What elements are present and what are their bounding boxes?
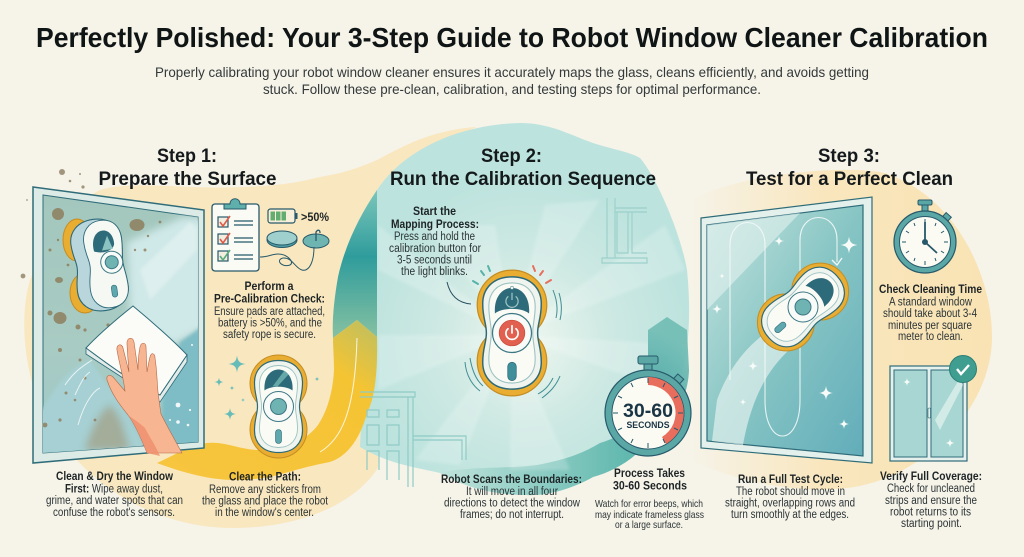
step 1 heading: Step 1: [157, 146, 217, 167]
text: robot scans the boundaries: It will move in all four [466, 486, 558, 498]
swoosh highlight line [320, 338, 357, 452]
text: process takes 30-60 seconds: may indicate frameless glass [595, 509, 704, 521]
icon: cleaning pad [267, 231, 297, 248]
clean window illustration [701, 197, 872, 463]
window line art [602, 198, 647, 263]
step 1 heading [98, 146, 276, 190]
text: verify full coverage: starting point. [901, 518, 962, 530]
arrow: callout to robot [447, 282, 471, 304]
icon: verified sliding window [890, 356, 976, 461]
step 1 heading: Prepare the Surface [98, 169, 276, 190]
icon: centered robot [250, 355, 307, 458]
text: clear the path [202, 470, 329, 519]
step 3 heading: Test for a Perfect Clean [746, 169, 953, 190]
icon: robot with power button [477, 270, 547, 396]
icon: robot moving diagonally [746, 251, 860, 363]
building line art [360, 392, 466, 487]
text: run a full test cycle: The robot should move in [736, 486, 845, 498]
icon: stopwatch 30-60 seconds: SECONDS [626, 420, 670, 431]
text: process takes 30-60 seconds [595, 466, 704, 531]
text: clean and dry: confuse the robot's sensors. [53, 507, 175, 519]
icon: robot on dirty window [63, 216, 131, 314]
text: pre-calibration check: battery is >50%, and the [218, 318, 322, 330]
text: start the mapping process: the light blinks. [401, 266, 468, 278]
text: process takes 30-60 seconds: Watch for error beeps, which [595, 498, 703, 510]
text: check cleaning time: minutes per square [888, 320, 972, 332]
text: check cleaning time: Check Cleaning Time [879, 282, 982, 296]
text: pre-calibration check [214, 279, 325, 341]
dirty window illustration [33, 187, 205, 463]
text: verify full coverage: strips and ensure the [885, 495, 977, 507]
text: robot scans the boundaries: directions to detect the window [444, 498, 581, 510]
text: process takes 30-60 seconds: or a large surface. [615, 519, 683, 531]
text: start the mapping process: Press and hold the [394, 231, 475, 243]
text: start the mapping process: 3-5 seconds until [397, 254, 472, 266]
text: robot scans the boundaries: Robot Scans the Boundaries: [441, 472, 582, 486]
text: run a full test cycle: Run a Full Test Cycle: [738, 472, 843, 486]
text: check cleaning time: should take about 3-4 [883, 308, 978, 320]
text: verify full coverage [880, 469, 982, 530]
icon: hand [107, 338, 182, 456]
text: process takes 30-60 seconds: 30-60 Seconds [613, 478, 687, 492]
intro text: stuck. Follow these pre-clean, calibration, and testing steps for optimal performance. [263, 81, 761, 97]
panel: step 3 [701, 146, 982, 530]
intro text: Properly calibrating your robot window cleaner ensures it accurately maps the glass, cleans efficiently, and avoids getting [155, 64, 869, 80]
text: clear the path: the glass and place the robot [202, 496, 329, 508]
text: clean and dry: Clean & Dry the Window [56, 469, 174, 483]
text: robot scans the boundaries: frames; do not interrupt. [460, 509, 564, 521]
text: pre-calibration check: safety rope is secure. [223, 329, 316, 341]
step 3 heading [746, 146, 953, 190]
text: run a full test cycle: straight, overlapping rows and [725, 498, 855, 510]
text: start the mapping process: calibration button for [389, 243, 481, 255]
icon: clock [894, 200, 956, 273]
text: verify full coverage: Check for uncleaned [887, 483, 975, 495]
panel: step 1 [21, 146, 329, 519]
title: Perfectly Polished: Your 3-Step Guide to Robot Window Cleaner Calibration [36, 22, 988, 53]
step 2 heading [390, 146, 656, 190]
text: pre-calibration check: Pre-Calibration Check: [214, 292, 325, 306]
text: clear the path: Clear the Path: [229, 470, 301, 484]
text: start the mapping process: Start the [413, 204, 456, 218]
background blob: step 1 yellow [24, 127, 477, 528]
text: check cleaning time [879, 282, 982, 343]
panel: step 2 [389, 146, 704, 531]
icon: safety rope [260, 230, 329, 270]
text: run a full test cycle: turn smoothly at the edges. [731, 509, 849, 521]
icon: stopwatch 30-60 seconds [605, 356, 691, 456]
teal ribbon left of step 2 [333, 190, 377, 338]
text: check cleaning time: meter to clean. [898, 331, 963, 343]
step 2 heading: Step 2: [481, 146, 542, 167]
icon: stopwatch 30-60 seconds: 30-60 [623, 401, 673, 422]
text: verify full coverage: robot returns to its [890, 506, 971, 518]
icon: blink signals [473, 266, 551, 284]
yellow swoosh under step 1 [157, 320, 377, 480]
text: clear the path: in the window's center. [215, 507, 314, 519]
text: robot scans the boundaries [441, 472, 582, 521]
teal peak behind stopwatch [648, 317, 689, 440]
text: verify full coverage: Verify Full Coverage: [880, 469, 982, 483]
icon: battery above 50 percent: >50% [301, 212, 329, 224]
light rays from the robot [378, 200, 688, 470]
text: pre-calibration check: Perform a [244, 279, 294, 293]
dust specks outside window [21, 169, 85, 278]
step 2 heading: Run the Calibration Sequence [390, 169, 656, 190]
icon: checklist clipboard [212, 199, 259, 271]
intro text [155, 64, 869, 97]
icon: vibration arcs [465, 290, 561, 398]
text: pre-calibration check: Ensure pads are attached, [214, 306, 325, 318]
text: start the mapping process [389, 204, 481, 278]
text: start the mapping process: Mapping Process: [391, 217, 479, 231]
background blob: step 3 yellow [690, 170, 992, 489]
text: run a full test cycle [725, 472, 855, 521]
icon: battery above 50 percent [268, 209, 329, 224]
step 3 heading: Step 3: [818, 146, 880, 167]
text: clear the path: Remove any stickers from [209, 484, 321, 496]
text: check cleaning time: A standard window [889, 296, 973, 308]
text: process takes 30-60 seconds: Process Takes [614, 466, 685, 480]
sparkles [214, 356, 320, 420]
icon: cleaning cloth [86, 306, 187, 402]
teal crescent along the bottom of step 2 [440, 415, 665, 495]
text: clean and dry: grime, and water spots that can [46, 495, 183, 507]
background blob: step 2 teal circle [338, 123, 689, 495]
text: clean and dry: First: Wipe away dust, [65, 484, 163, 496]
text: clean and dry [46, 469, 183, 519]
